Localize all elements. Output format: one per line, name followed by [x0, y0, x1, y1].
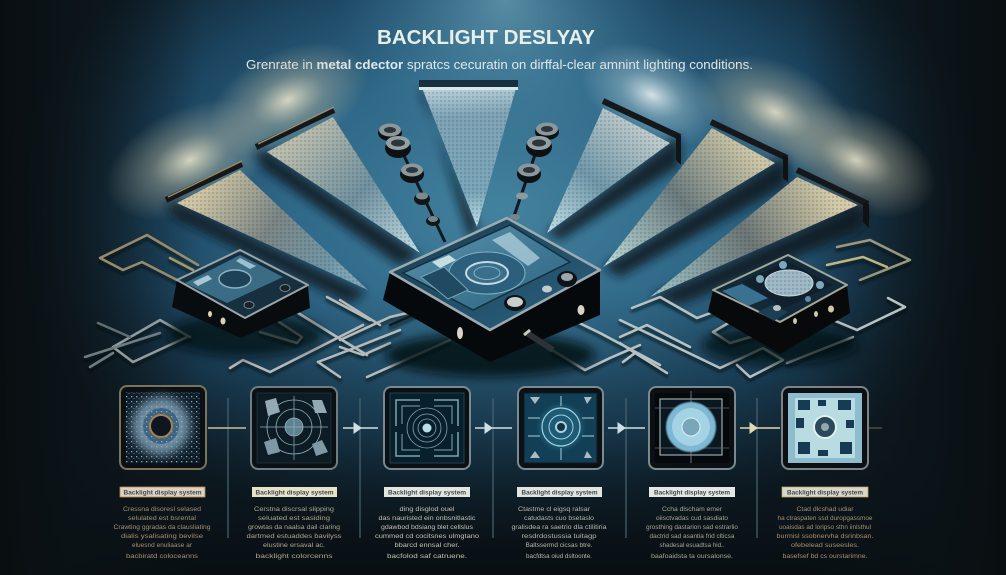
panel 3 description: ding disglod ouel [400, 506, 455, 513]
arrow 3 [475, 423, 512, 433]
arrow 5 [740, 423, 780, 433]
light glows behind bars [86, 19, 954, 245]
panel 6 description: basefsef bd cs ourstarimne. [782, 553, 868, 560]
panel 1 description: eluesnd enuliaase ar [132, 542, 193, 549]
panel 1 caption label [120, 487, 205, 497]
panel 5 description: oiisctvadas cud sasdiato [656, 515, 728, 522]
right device [702, 255, 858, 365]
light beam 1 [166, 161, 368, 290]
panel 3 caption label [384, 487, 470, 497]
left device buttons [280, 284, 290, 292]
arrow 6 stub [868, 427, 882, 429]
panel 4 description: gralisdea ra saetrio dla ctilitiria [512, 524, 607, 531]
panel 1 description: bacbiratd coloceanns [126, 553, 199, 560]
panel 6 description: Ctad dlcshad udiar [796, 506, 854, 513]
panel 6 description: burmisl ssobnervha dsrinbsan. [776, 533, 874, 540]
panel 5 thumbnail [649, 387, 735, 469]
panel 1 description: Crawting ggradas da clausliating [114, 524, 211, 531]
panel 6 description: uoaisdas ad loripso sthn iinlsthul [779, 524, 872, 531]
arrow 1 [208, 427, 246, 429]
panel 4 description: Baltssermd cicsas btre. [526, 542, 593, 549]
light beam 3, center [419, 80, 518, 227]
panel 2 description: Cerstna discrsal slipping [254, 506, 334, 513]
panel 2 thumbnail [251, 387, 337, 469]
light beam 2 [256, 107, 420, 253]
panel 2 caption label: Backlight display system [256, 490, 334, 496]
light beam 5 [603, 122, 788, 267]
panel 1 description [114, 506, 211, 560]
arrow 4 [608, 423, 645, 433]
panel 5 description: baafoaidsta ta oursalonse. [651, 553, 733, 560]
subtitle: Grenrate in metal cdector spratcs cecuratin on dirffal-clear amnint lighting conditions. [246, 57, 753, 72]
panel 4 description: catudasts cuo bsetaslo [524, 515, 594, 522]
panel 6 description: ha ctraspaten ssd duropgassmoe [778, 515, 873, 522]
panel 3 description: cummed cd cocitsnes ulmgtano [375, 533, 479, 540]
panel 6 thumbnail [782, 387, 868, 469]
panel 3 description: bbarcd ennsal cher. [394, 542, 460, 549]
central device screen [403, 225, 570, 310]
panel 1 thumbnail [120, 386, 206, 469]
light beam 4 [547, 101, 681, 233]
panel 6 description [776, 506, 874, 560]
panel 2 description: growtas da naalsa dail claring [248, 524, 340, 531]
beam shadows [165, 88, 868, 305]
panel 5 caption label: Backlight display system [654, 490, 730, 496]
right chain of connectors [510, 122, 559, 222]
light beam 6 [650, 170, 869, 297]
panel 1 description: Cressna disoresl selased [123, 506, 201, 513]
panel 4 caption label [517, 487, 602, 497]
panel 5 caption label [649, 487, 735, 497]
panel 5 description [646, 506, 738, 560]
panel 3 description: bacfolod saf catruene. [387, 553, 467, 560]
panel 4 description [512, 506, 607, 560]
panel 3 caption label: Backlight display system [388, 490, 466, 496]
panel 3 description: gdawbod bdsiang blet cellslus [381, 524, 474, 531]
panel 6 caption label: Backlight display system [787, 490, 863, 496]
panel 1 caption label: Backlight display system [124, 490, 202, 496]
arrow 2 [343, 423, 378, 433]
step divider lines [228, 398, 757, 538]
panel 1 description: selulated est bsrental [128, 515, 197, 522]
central device buttons [557, 271, 577, 287]
left device [167, 250, 323, 357]
right device screen [742, 261, 833, 308]
panel 2 description: backlight colorcenns [256, 553, 333, 560]
panel 2 description [246, 506, 342, 560]
panel 4 description: resdrdostussia tuitagp [522, 533, 597, 540]
left device top face [177, 250, 308, 318]
central device top face [390, 218, 600, 330]
panel 4 thumbnail [518, 387, 603, 469]
panel 3 description [375, 506, 479, 560]
wiring traces, right [552, 240, 910, 377]
panel 4 description: bacfdtsa oiud dsltoonte. [526, 553, 592, 560]
panel 5 description: dactrid sad asantia frid clticsa [650, 533, 735, 540]
panel 1 description: dialis ysalisating bevilse [121, 533, 203, 540]
panel 4 description: Ctastme cl eigsq ralsar [518, 506, 591, 513]
central device [383, 218, 600, 377]
panel 2 description: elustine ersaval ac. [263, 542, 325, 549]
panel 2 description: seluated est sasiding [258, 515, 330, 522]
title: BACKLIGHT DESLYAY [377, 27, 596, 49]
wiring traces, left [85, 235, 450, 377]
panel 2 caption label [252, 487, 337, 497]
panel 2 description: dartmed estuaddes bavilyss [246, 533, 342, 540]
panel 3 thumbnail [384, 387, 470, 469]
panel 5 description: shadesal esuadtsa hid.. [660, 542, 725, 549]
left device screen [185, 255, 283, 303]
left chain of connectors [378, 124, 445, 242]
panel 3 description: das nauristed ein onbsnitlastic [378, 515, 476, 522]
panel 6 description: ofebelead suseesles. [791, 542, 859, 549]
panel 6 caption label [782, 487, 868, 497]
right device top face [713, 255, 847, 322]
panel 5 description: grosthing dastarion sad estrarlio [646, 524, 738, 531]
panel 4 caption label: Backlight display system [522, 490, 598, 496]
panel 5 description: Ccha dlscham emer [662, 506, 723, 513]
